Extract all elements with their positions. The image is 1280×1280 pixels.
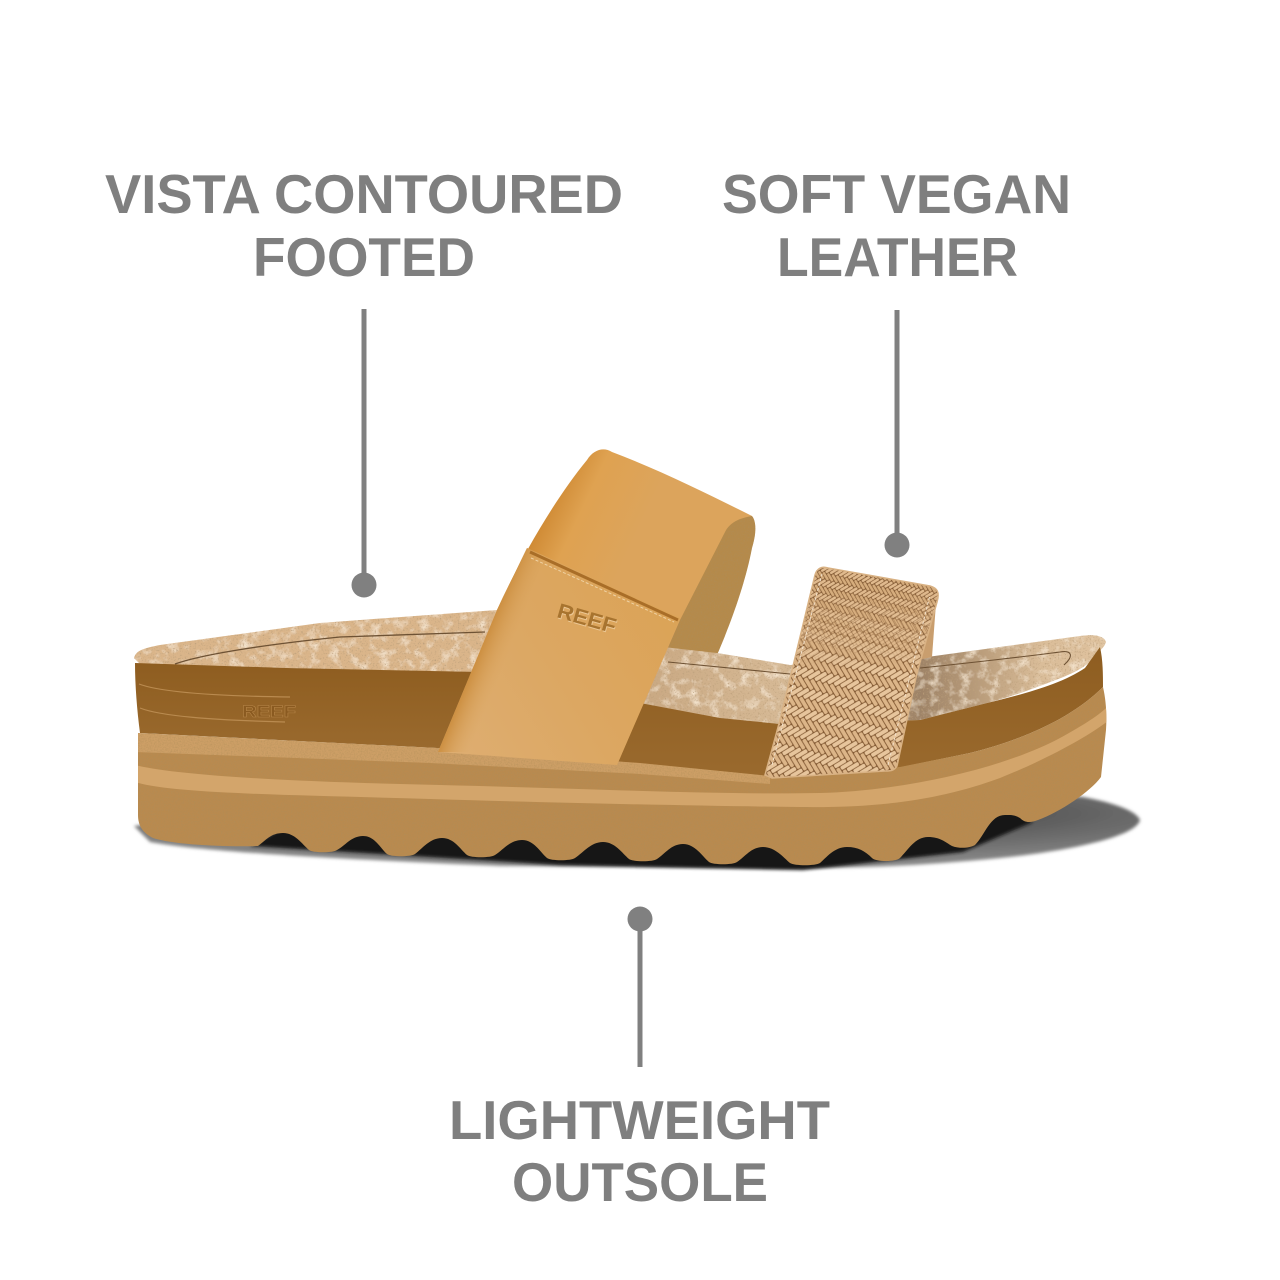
heading: Soft vegan leather: SOFT VEGAN: [722, 163, 1071, 225]
cork footbed: middle and toe: [600, 635, 1106, 724]
heading: Vista contoured footed: VISTA CONTOURED: [105, 163, 623, 225]
upper light band: [135, 733, 770, 784]
woven strap: [764, 566, 939, 779]
callout line: footbed: [352, 309, 376, 598]
main leather strap: [438, 449, 752, 765]
strap left edge shading: [438, 548, 545, 752]
heading: Lightweight outsole: OUTSOLE: [512, 1151, 768, 1213]
back strap lining: [660, 515, 755, 655]
callout line: outsole: [628, 906, 652, 1067]
strap seam stitching: [530, 552, 678, 620]
callout line: leather strap: [884, 310, 910, 558]
woven strap stitching: [772, 574, 930, 765]
outsole light stripe: [135, 706, 1108, 807]
infographic: sandal feature callouts: [105, 174, 1142, 1202]
REEF deboss on midsole: REEF: [242, 702, 296, 721]
footbed stitch line: toe: [668, 652, 1070, 674]
heading: Vista contoured footed: [105, 163, 623, 288]
heading: Vista contoured footed: FOOTED: [253, 226, 475, 288]
REEF deboss on strap: REEF: [555, 600, 619, 638]
heading: Lightweight outsole: [449, 1089, 830, 1213]
heading: Soft vegan leather: LEATHER: [777, 226, 1018, 288]
footbed stitch line: heel: [175, 632, 485, 664]
strap lower panel: [438, 548, 680, 765]
cork footbed: heel: [134, 609, 520, 680]
midsole grooves: [139, 684, 290, 722]
midsole: heel: [135, 663, 480, 750]
outsole: [138, 687, 1106, 866]
midsole: middle and toe: [600, 647, 1103, 778]
heading: Lightweight outsole: LIGHTWEIGHT: [449, 1089, 830, 1151]
ground shadow: [134, 790, 1140, 870]
REEF deboss on strap: REEF: [555, 601, 619, 640]
sandal illustration: [120, 449, 1140, 880]
heading: Soft vegan leather: [722, 163, 1071, 288]
